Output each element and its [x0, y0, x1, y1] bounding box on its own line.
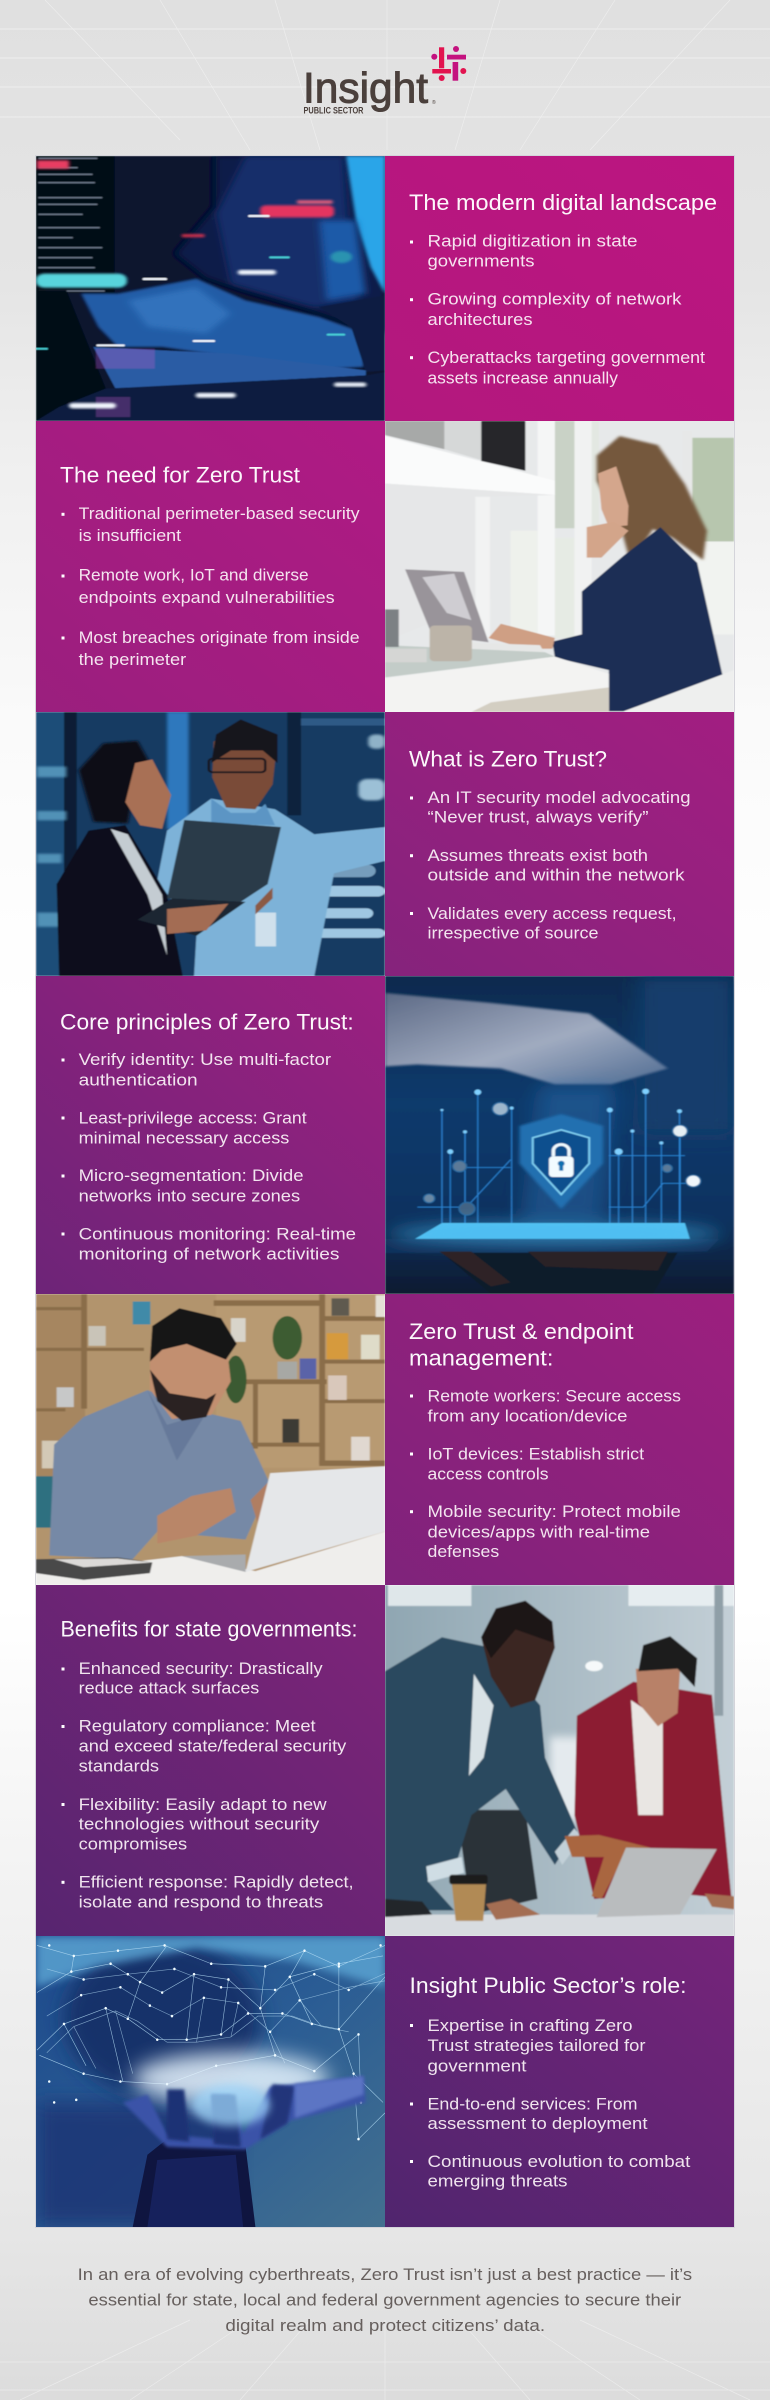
bullet list: from any location/device — [428, 1408, 628, 1426]
bullet list: Expertise in crafting Zero — [428, 2017, 632, 2035]
bullet list: “Never trust, always verify” — [428, 808, 648, 826]
bullet list: authentication — [79, 1072, 198, 1090]
text panel: The modern digital landscape — [385, 156, 734, 421]
closing statement — [78, 2266, 692, 2335]
bullet list: Micro-segmentation: Divide — [79, 1167, 304, 1185]
text panel: Benefits for state governments — [36, 1585, 385, 1936]
bullet list: Verify identity: Use multi-factor — [79, 1051, 332, 1069]
heading: Zero Trust & endpoint — [409, 1319, 634, 1344]
bullet list: Least-privilege access: Grant — [79, 1109, 307, 1127]
photo: hands typing on laptop in blue light — [36, 156, 385, 421]
row 7: Insight Public Sector's role — [36, 1936, 734, 2227]
bullet list: technologies without security — [79, 1816, 320, 1834]
closing statement: digital realm and protect citizens’ data. — [225, 2317, 545, 2335]
photo: two executives reviewing a laptop — [385, 1585, 734, 1936]
bullet list: Most breaches originate from inside — [79, 629, 360, 647]
bullet list: Validates every access request, — [428, 905, 676, 923]
bullet list: Continuous evolution to combat — [428, 2153, 691, 2171]
closing statement: essential for state, local and federal government agencies to secure their — [88, 2291, 682, 2309]
bullet list: End-to-end services: From — [428, 2095, 638, 2113]
bullet list: standards — [79, 1757, 159, 1775]
row 2: The need for Zero Trust — [36, 421, 734, 712]
bullet list: reduce attack surfaces — [79, 1680, 259, 1698]
bullet list: irrespective of source — [428, 925, 598, 943]
bullet list — [410, 233, 705, 387]
heading: Core principles of Zero Trust: — [60, 1009, 354, 1034]
bullet list — [410, 1387, 681, 1561]
bullet list: emerging threats — [428, 2173, 568, 2191]
bullet list: Remote work, IoT and diverse — [79, 567, 309, 585]
logo subline: PUBLIC SECTOR — [304, 106, 364, 116]
photo: woman at laptop by a bright window — [385, 421, 734, 712]
bullet list: is insufficient — [79, 527, 182, 545]
bullet list: and exceed state/federal security — [79, 1738, 347, 1756]
registered mark: ® — [432, 99, 436, 106]
bullet list: the perimeter — [79, 651, 187, 669]
bullet list: Traditional perimeter-based security — [79, 505, 360, 523]
bullet list: Cyberattacks targeting government — [428, 349, 705, 367]
bullet list: defenses — [428, 1543, 499, 1561]
bullet list: endpoints expand vulnerabilities — [79, 589, 335, 607]
bullet list: isolate and respond to threats — [79, 1893, 323, 1911]
heading: What is Zero Trust? — [409, 746, 607, 771]
bullet list: assets increase annually — [428, 369, 619, 387]
bullet list: Continuous monitoring: Real-time — [79, 1225, 356, 1243]
bullet list: Efficient response: Rapidly detect, — [79, 1874, 354, 1892]
background grid bottom — [0, 2320, 770, 2400]
bullet list — [410, 789, 690, 943]
logo wordmark: Insight — [303, 64, 428, 112]
bullet list: architectures — [428, 311, 532, 329]
bullet list: Growing complexity of network — [428, 291, 682, 309]
row 6: Benefits for state governments — [36, 1585, 734, 1936]
heading: Benefits for state governments: — [60, 1616, 358, 1642]
heading: Insight Public Sector’s role: — [410, 1973, 686, 1998]
panel frame — [36, 156, 734, 2228]
logo: Insight Public Sector — [303, 46, 466, 116]
row 4: Core principles of Zero Trust — [36, 976, 734, 1294]
bullet list: Flexibility: Easily adapt to new — [79, 1796, 327, 1814]
row 1: The modern digital landscape — [36, 156, 734, 421]
photo: hand over shield and tablet — [385, 976, 734, 1294]
heading: management: — [409, 1345, 553, 1370]
bullet list: monitoring of network activities — [79, 1245, 339, 1263]
bullet list: assessment to deployment — [428, 2115, 648, 2133]
bullet list: outside and within the network — [428, 867, 685, 885]
logo icon — [431, 46, 466, 81]
closing statement: In an era of evolving cyberthreats, Zero Trust isn’t just a best practice — it’s — [78, 2266, 692, 2284]
bullet list: access controls — [428, 1466, 548, 1484]
bullet list — [62, 1051, 356, 1263]
text panel: The need for Zero Trust — [36, 421, 385, 712]
text panel: Zero Trust & endpoint management — [385, 1294, 734, 1585]
bullet list: devices/apps with real-time — [428, 1523, 650, 1541]
text panel: Insight Public Sector's role — [385, 1936, 734, 2227]
background grid top — [0, 0, 770, 150]
bullet list: governments — [428, 253, 534, 271]
bullet list: IoT devices: Establish strict — [428, 1446, 645, 1464]
bullet list: Remote workers: Secure access — [428, 1387, 681, 1405]
row 3: What is Zero Trust? — [36, 712, 734, 976]
bullet list: networks into secure zones — [79, 1187, 300, 1205]
bullet list: compromises — [79, 1835, 187, 1853]
heading: The need for Zero Trust — [60, 462, 300, 488]
bullet list: Rapid digitization in state — [428, 233, 638, 251]
bullet list — [62, 1660, 354, 1911]
bullet list: Enhanced security: Drastically — [79, 1660, 323, 1678]
row 5: Zero Trust & endpoint management — [36, 1294, 734, 1585]
bullet list — [62, 505, 360, 669]
heading: The modern digital landscape — [409, 190, 717, 215]
bullet list: Assumes threats exist both — [428, 847, 648, 865]
bullet list: Trust strategies tailored for — [428, 2037, 646, 2055]
text panel: Core principles of Zero Trust — [36, 976, 385, 1294]
bullet list: Mobile security: Protect mobile — [428, 1503, 681, 1521]
bullet list — [410, 2017, 691, 2191]
bullet list: government — [428, 2058, 527, 2076]
bullet list: minimal necessary access — [79, 1130, 289, 1148]
photo: glowing hand under a digital network — [36, 1936, 385, 2227]
bullet list: Regulatory compliance: Meet — [79, 1718, 316, 1736]
heading — [409, 1319, 634, 1370]
photo: two colleagues with laptop in a data centre — [36, 712, 385, 976]
text panel: What is Zero Trust? — [385, 712, 734, 976]
bullet list: An IT security model advocating — [428, 789, 690, 807]
photo: smiling man at a laptop in front of a bookshelf — [36, 1294, 385, 1585]
